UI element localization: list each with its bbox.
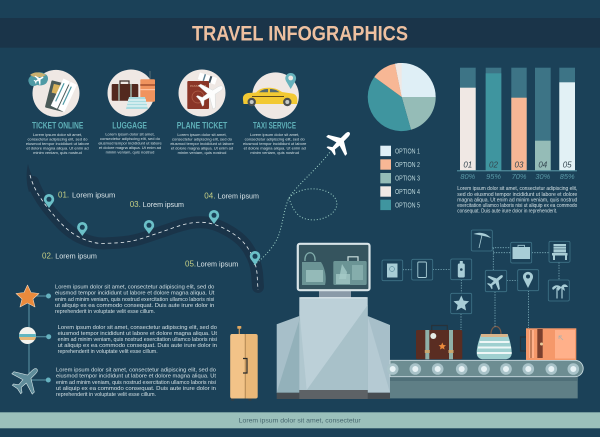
text: taxi service: consectetur adipiscing elit, sed do xyxy=(245,136,305,141)
text: taxi service xyxy=(243,132,307,155)
header band xyxy=(0,18,600,48)
legend xyxy=(380,146,420,210)
text block 3: ut aliquip ex ea commodo consequat. Duis aute irure dolor in xyxy=(56,386,216,392)
bar chart: 85% xyxy=(560,172,575,181)
text block 3: enim ad minim veniam, quis nostrud exercitation ullamco laboris nisi xyxy=(56,380,216,386)
text block 1: Lorem ipsum dolor sit amet, consectetur adipiscing elit, sed do xyxy=(55,284,214,290)
route stop 02: 02. xyxy=(42,251,53,260)
route stop 04: Lorem ipsum xyxy=(218,191,259,200)
route stop 05: 05. xyxy=(185,259,196,268)
legend: OPTION 2 xyxy=(395,162,420,169)
timeline xyxy=(6,285,51,400)
route stop 03: Lorem ipsum xyxy=(143,200,184,209)
icon: taxi pin xyxy=(285,73,296,89)
bar chart: 70% xyxy=(512,172,527,181)
text: chart description: Lorem ipsum dolor sit amet, consectetur adipiscing elit, xyxy=(457,186,577,192)
icon: palm trees xyxy=(548,280,569,301)
text: luggage: eiusmod tempor incididunt ut labore xyxy=(98,141,162,146)
text: taxi service: eiusmod tempor incididunt ut labore xyxy=(243,141,307,146)
footer band xyxy=(0,412,600,428)
text: plane ticket: Lorem ipsum dolor sit amet, xyxy=(177,132,227,137)
suitcase xyxy=(230,326,258,401)
text: luggage: Lorem ipsum dolor sit amet, xyxy=(105,132,155,137)
road route xyxy=(27,164,258,290)
icon: tickets xyxy=(32,70,80,117)
scanner body xyxy=(299,290,368,399)
legend: OPTION 3 xyxy=(395,176,420,183)
text: plane ticket: consectetur adipiscing elit, sed do xyxy=(172,136,233,141)
text block 2 xyxy=(58,325,218,355)
legend: OPTION 4 xyxy=(395,189,420,196)
icon: phone xyxy=(412,259,433,280)
bar chart xyxy=(457,68,577,181)
text: ticket online: consectetur adipiscing elit, sed do xyxy=(27,136,88,141)
text: chart description: sed do eiusmod tempor incididunt ut labore et dolore xyxy=(457,192,577,198)
bar chart: 80% xyxy=(460,172,476,181)
legend: OPTION 1 xyxy=(395,148,420,156)
text: ticket online xyxy=(26,132,90,155)
scanner wings xyxy=(277,316,390,399)
bar chart: 01 xyxy=(463,160,472,170)
text block 1: enim ad minim veniam, quis nostrud exercitation ullamco laboris nisi xyxy=(55,297,214,303)
route stop 05 xyxy=(185,251,260,268)
text block 3: reprehenderit in voluptate velit esse cillum. xyxy=(56,392,156,398)
bar chart: 04 xyxy=(538,160,548,170)
panel: luggage xyxy=(98,70,162,155)
striped bag xyxy=(477,326,512,359)
icon: plane box xyxy=(484,269,508,293)
icon: taxi xyxy=(243,72,299,119)
text block 1: ut aliquip ex ea commodo consequat. Duis aute irure dolor in xyxy=(55,303,214,309)
panel: taxi service xyxy=(243,72,307,155)
title: TRAVEL INFOGRAPHICS xyxy=(192,22,408,45)
route stop 04 xyxy=(204,191,259,224)
text block 2: enim ad minim veniam, quis nostrud exercitation ullamco laboris nisi xyxy=(58,337,217,343)
text: chart description: consequat. Duis aute irure dolor in reprehenderit. xyxy=(457,208,557,214)
icon: umbrella xyxy=(471,230,492,251)
text: taxi service: minim veniam, quis nostrud xyxy=(250,150,299,155)
text: chart description: magna aliqua. Ut enim ad minim veniam, quis nostrud xyxy=(457,198,577,204)
panel: ticket online xyxy=(26,70,90,155)
route stop 04: 04. xyxy=(204,191,215,200)
heading: taxi service: TAXI SERVICE xyxy=(253,120,296,131)
text: chart description xyxy=(457,186,577,214)
text: luggage xyxy=(98,132,162,155)
bar chart: 95% xyxy=(486,172,501,181)
text block 1: reprehenderit in voluptate velit esse cillum. xyxy=(55,309,155,315)
pie chart xyxy=(368,63,436,131)
icon: bottle xyxy=(451,259,472,280)
route stop 01: 01. xyxy=(58,190,69,199)
text: chart description: exercitation ullamco laboris nisi ut aliquip ex ea commodo xyxy=(457,203,577,209)
route stop 01: Lorem ipsum xyxy=(72,190,115,199)
text: luggage: minim veniam, quis nostrud xyxy=(106,150,154,155)
heading: ticket online: TICKET ONLINE xyxy=(32,120,83,131)
icon: briefcase xyxy=(511,242,532,263)
scanner monitor xyxy=(298,244,370,290)
text: plane ticket: minim veniam, quis nostrud xyxy=(178,150,226,155)
heading: plane ticket: PLANE TICKET xyxy=(177,120,227,131)
text: taxi service: Lorem ipsum dolor sit amet, xyxy=(250,132,299,137)
route stop 02: Lorem ipsum xyxy=(55,251,97,260)
bar chart: 03 xyxy=(515,160,524,170)
text: ticket online: et dolore magna aliqua. Ut enim ad xyxy=(26,145,89,150)
dotted flight path xyxy=(254,152,337,265)
text block 3: Lorem ipsum dolor sit amet, consectetur adipiscing elit, sed do xyxy=(56,368,216,374)
icon: passport xyxy=(382,260,403,281)
text: ticket online: eiusmod tempor incididunt ut labore xyxy=(26,141,90,146)
text: ticket online: minim veniam, quis nostrud xyxy=(33,150,82,155)
text: luggage: consectetur adipiscing elit, sed do xyxy=(100,136,161,141)
panel: plane ticket xyxy=(170,70,234,155)
text block 1 xyxy=(55,284,215,315)
route stop 02 xyxy=(42,222,97,260)
text: ticket online: Lorem ipsum dolor sit amet, xyxy=(33,132,82,137)
footer text: Lorem ipsum dolor sit amet, consectetur xyxy=(239,418,362,424)
text block 2: eiusmod tempor incididunt ut labore et dolore magna aliqua. Ut xyxy=(58,331,218,337)
text: plane ticket xyxy=(170,132,234,155)
text: plane ticket: et dolore magna aliqua. Ut enim ad xyxy=(171,145,233,150)
icon: passport and plane: PASSPORT xyxy=(190,84,206,88)
icon: star box xyxy=(451,293,472,314)
icon: location pin box xyxy=(518,270,539,291)
bar chart: 02 xyxy=(489,160,498,170)
bar chart: 30% xyxy=(535,172,551,181)
icon: plane xyxy=(6,359,47,400)
text block 2: reprehenderit in voluptate velit esse cillum. xyxy=(58,349,158,355)
route stop 03 xyxy=(130,200,184,234)
icon: cloud with plane xyxy=(28,72,48,86)
icon: white plane xyxy=(321,123,359,161)
icon network links xyxy=(403,248,559,330)
route stop 01 xyxy=(44,190,115,208)
text block 3: eiusmod tempor incididunt ut labore et dolore magna aliqua. Ut xyxy=(56,374,217,380)
text block 2: Lorem ipsum dolor sit amet, consectetur adipiscing elit, sed do xyxy=(58,325,217,331)
text block 2: ut aliquip ex ea commodo consequat. Duis aute irure dolor in xyxy=(58,343,217,349)
brown suitcase xyxy=(416,326,462,359)
icon: beach ball xyxy=(19,327,36,344)
security scanner xyxy=(277,244,390,399)
text: taxi service: et dolore magna aliqua. Ut enim ad xyxy=(244,145,306,150)
heading: luggage: LUGGAGE xyxy=(112,120,147,131)
text: plane ticket: eiusmod tempor incididunt ut labore xyxy=(170,141,234,146)
route stop 05: Lorem ipsum xyxy=(197,259,238,268)
text block 3 xyxy=(56,368,217,398)
bar chart: 05 xyxy=(563,160,572,170)
icon: star xyxy=(16,285,39,307)
legend: OPTION 5 xyxy=(395,202,420,209)
text: luggage: et dolore magna aliqua. Ut enim ad xyxy=(99,145,161,150)
orange suitcase xyxy=(520,328,576,360)
conveyor belt xyxy=(387,360,583,398)
icon: beach chair xyxy=(549,241,570,262)
route stop 03: 03. xyxy=(130,200,141,209)
text block 1: eiusmod tempor incididunt ut labore et dolore magna aliqua. Ut xyxy=(55,290,215,296)
icon: luggage group xyxy=(108,70,155,116)
